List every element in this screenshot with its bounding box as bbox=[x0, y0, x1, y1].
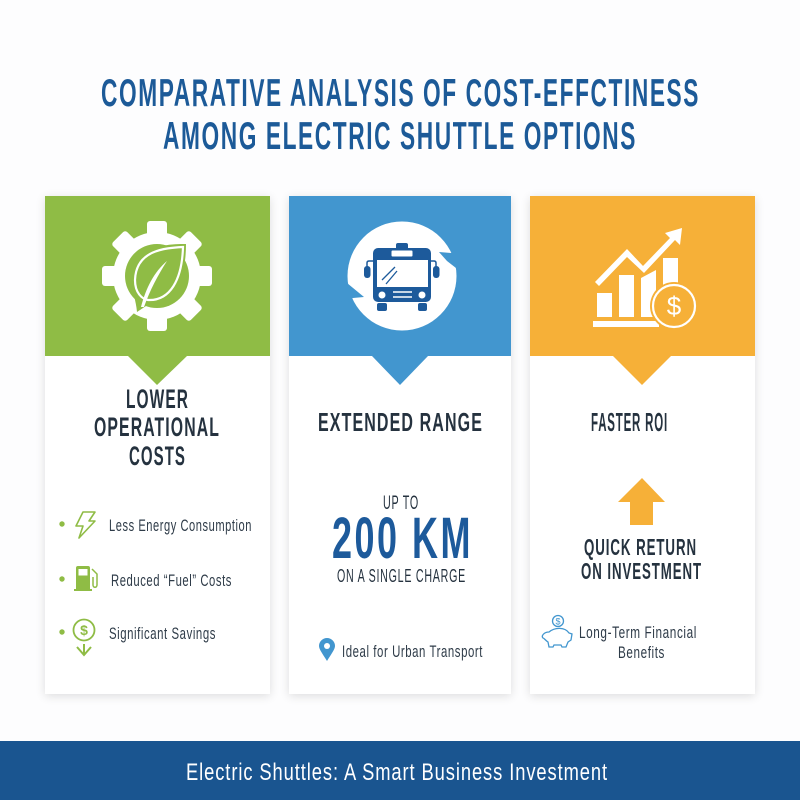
icon: growth chart with coin: $ bbox=[667, 291, 682, 321]
footer banner: Electric Shuttles: A Smart Business Investment bbox=[186, 759, 608, 786]
panel: faster roi: FASTER ROI bbox=[591, 407, 668, 437]
list item: significant savings: $ bbox=[80, 622, 88, 638]
heading: lower operational costs: LOWER bbox=[126, 384, 189, 414]
list item: less energy consumption: Less Energy Consumption bbox=[109, 516, 252, 535]
heading: lower operational costs bbox=[94, 384, 220, 471]
panel: extended range bbox=[289, 196, 511, 696]
list item: significant savings: Significant Savings bbox=[109, 624, 216, 643]
heading: extended range: EXTENDED RANGE bbox=[318, 407, 483, 437]
icon: gear with leaf bbox=[102, 221, 212, 331]
stat: 200 km: 200 KM bbox=[332, 506, 473, 571]
list item: reduced fuel costs bbox=[59, 566, 232, 591]
panel header: orange bbox=[530, 196, 755, 385]
heading: lower operational costs: OPERATIONAL bbox=[94, 412, 220, 442]
icon: bus in circle bbox=[338, 222, 475, 330]
icon: up arrow bbox=[618, 478, 665, 525]
text: quick return on investment bbox=[581, 534, 702, 584]
icon: growth chart with coin bbox=[593, 228, 698, 330]
icon: piggy bank: $ bbox=[555, 616, 561, 626]
text: quick return on investment: QUICK RETURN bbox=[584, 534, 697, 560]
title bbox=[101, 72, 700, 158]
footer banner bbox=[0, 741, 800, 800]
text: on a single charge: ON A SINGLE CHARGE bbox=[337, 566, 466, 586]
list item: significant savings bbox=[59, 620, 216, 655]
list item: less energy consumption bbox=[59, 512, 252, 538]
note: long-term financial benefits: Long-Term Financial bbox=[579, 623, 697, 642]
text: quick return on investment: ON INVESTMENT bbox=[581, 558, 702, 584]
panel header: green bbox=[45, 196, 270, 385]
note: long-term financial benefits: Benefits bbox=[618, 643, 665, 662]
icon: piggy bank bbox=[542, 616, 572, 647]
heading: lower operational costs: COSTS bbox=[129, 441, 186, 471]
note: long-term financial benefits bbox=[579, 623, 697, 662]
panel: faster roi bbox=[530, 196, 755, 696]
list item: reduced fuel costs: Reduced “Fuel” Costs bbox=[111, 571, 232, 590]
panel header: blue bbox=[289, 196, 511, 385]
note: ideal for urban transport bbox=[319, 638, 483, 661]
panel: lower operational costs bbox=[45, 196, 270, 696]
note: ideal for urban transport: Ideal for Urban Transport bbox=[342, 642, 483, 661]
text: up to: UP TO bbox=[383, 493, 419, 514]
